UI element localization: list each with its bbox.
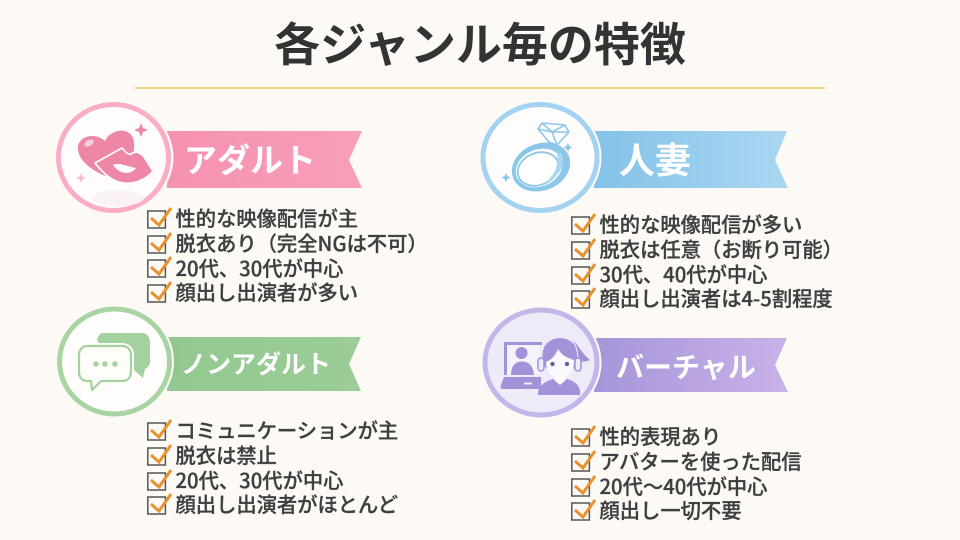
checklist: married: 顔出し出演者は4-5割程度 bbox=[600, 282, 833, 312]
checklist: adult: 顔出し出演者が多い bbox=[176, 276, 358, 306]
checklist: virtual: 顔出し一切不要 bbox=[600, 494, 741, 524]
ribbon: married bbox=[594, 131, 788, 188]
ribbon: non-adult bbox=[167, 337, 361, 391]
checklist: married: 脱衣は任意（お断り可能） bbox=[600, 233, 843, 263]
checklist: virtual: アバターを使った配信 bbox=[600, 445, 802, 475]
icon: chat bubbles badge bbox=[57, 306, 172, 416]
panel: married bbox=[480, 102, 843, 312]
panel: adult bbox=[56, 104, 428, 306]
icon: virtual streamer badge bbox=[482, 308, 600, 418]
title: 各ジャンル毎の特徴 bbox=[274, 9, 686, 75]
checklist: married: 30代、40代が中心 bbox=[600, 258, 767, 288]
checklist: married: 性的な映像配信が多い bbox=[600, 208, 802, 238]
ribbon: virtual bbox=[594, 338, 788, 392]
icon: hearts and lips badge bbox=[56, 104, 171, 212]
panel: virtual bbox=[482, 308, 802, 524]
checklist: adult bbox=[148, 202, 428, 306]
checklist: virtual: 20代〜40代が中心 bbox=[600, 470, 767, 500]
panel: non-adult bbox=[57, 306, 398, 518]
checklist: adult: 20代、30代が中心 bbox=[176, 252, 343, 282]
checklist: married bbox=[572, 208, 843, 312]
icon: diamond ring badge bbox=[480, 102, 600, 214]
checklist: non-adult: コミュニケーションが主 bbox=[176, 414, 398, 444]
ribbon: adult bbox=[167, 131, 362, 188]
checklist: virtual bbox=[572, 420, 802, 524]
checklist: non-adult: 20代、30代が中心 bbox=[176, 464, 343, 494]
ribbon: virtual: バーチャル bbox=[616, 346, 756, 386]
checklist: non-adult: 顔出し出演者がほとんど bbox=[176, 488, 398, 518]
ribbon: married: 人妻 bbox=[619, 132, 691, 184]
checklist: virtual: 性的表現あり bbox=[600, 420, 721, 450]
checklist: adult: 性的な映像配信が主 bbox=[176, 202, 358, 232]
ribbon: non-adult: ノンアダルト bbox=[181, 345, 331, 381]
checklist: non-adult: 脱衣は禁止 bbox=[176, 439, 277, 469]
checklist: non-adult bbox=[148, 414, 398, 518]
checklist: adult: 脱衣あり（完全NGは不可） bbox=[176, 227, 428, 257]
ribbon: adult: アダルト bbox=[184, 134, 316, 182]
